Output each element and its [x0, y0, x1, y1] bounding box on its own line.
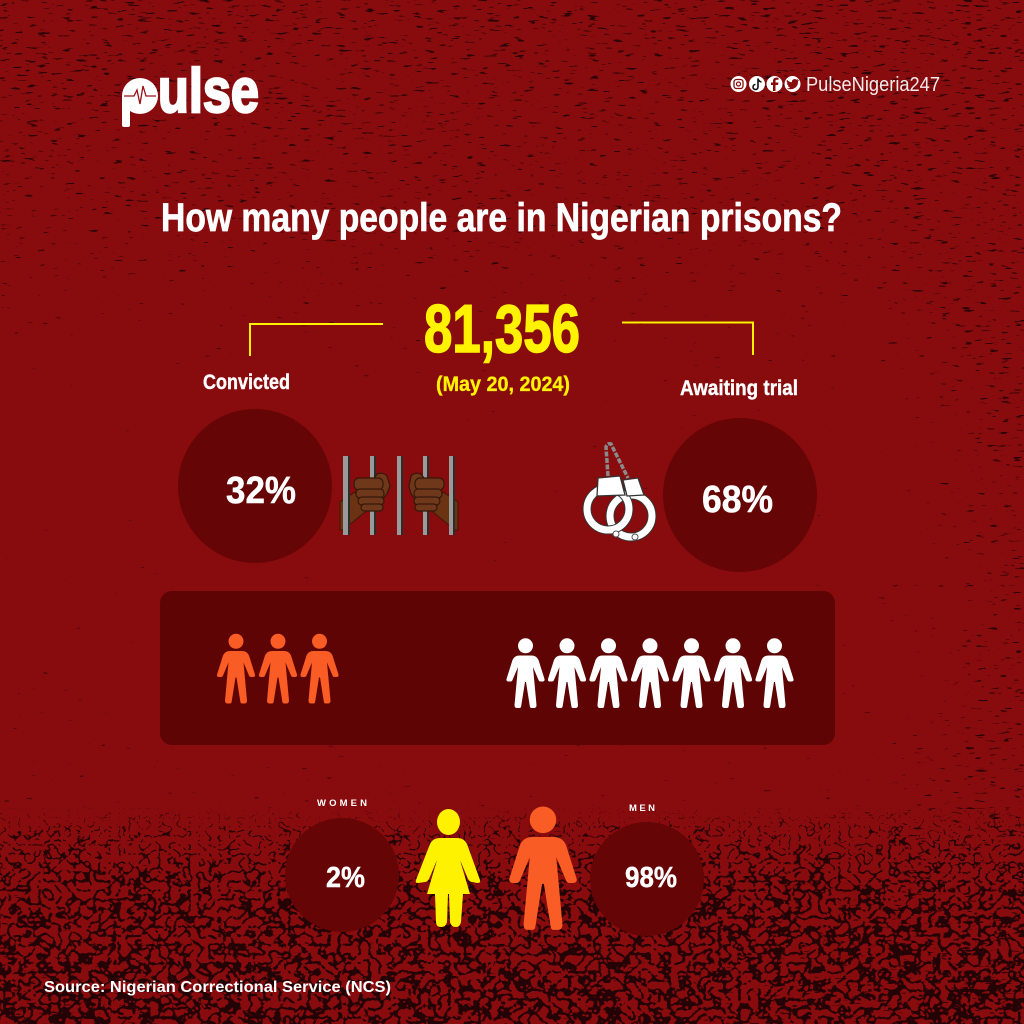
orange people: convicted: [217, 634, 339, 704]
arms: [340, 492, 365, 530]
connector: right bracket: [622, 322, 753, 355]
cuff locks: [597, 476, 625, 496]
stat: women 2%: 2%: [326, 862, 365, 894]
icon: instagram: [730, 76, 746, 92]
logo: pulse: p: [130, 77, 147, 108]
logo: pulse: [122, 57, 259, 127]
bars: [343, 456, 455, 535]
source: Source: Nigerian Correctional Service (NCS): [44, 979, 391, 996]
panel: people ratio: [160, 591, 835, 745]
white people: awaiting trial: [506, 638, 794, 708]
social handles: [730, 74, 940, 96]
icon: handcuffs: [587, 444, 652, 540]
label: women: WOMEN: [317, 798, 367, 809]
label: convicted: Convicted: [203, 371, 290, 394]
label: men: MEN: [629, 803, 655, 814]
stat: convicted 32%: 32%: [226, 470, 296, 512]
icon: tiktok: [749, 76, 765, 92]
label: awaiting trial: Awaiting trial: [680, 377, 798, 400]
stat: women 2%: [285, 818, 399, 932]
fist: left: [354, 473, 390, 511]
title: How many people are in Nigerian prisons?: [161, 196, 842, 240]
handle text: PulseNigeria247: [806, 74, 940, 96]
rings: [610, 495, 652, 537]
icon: facebook: [766, 76, 782, 92]
connector: left bracket: [250, 324, 383, 356]
chain: [606, 444, 628, 478]
stat: men 98%: 98%: [625, 862, 677, 894]
stat: convicted 32%: [178, 409, 332, 563]
logo: pulse: ulse: [158, 57, 259, 126]
icon: hands gripping prison bars: [340, 456, 458, 535]
stat: men 98%: [590, 822, 704, 936]
date: (May 20, 2024): [436, 373, 570, 396]
icon: woman: [416, 809, 480, 927]
stat: awaiting trial 68%: 68%: [702, 479, 773, 521]
stat: awaiting trial 68%: [663, 418, 817, 572]
fist: right: [409, 473, 444, 511]
icon: man: [509, 807, 577, 930]
icon: twitter: [784, 76, 800, 92]
total figure: 81,356: [424, 291, 580, 367]
